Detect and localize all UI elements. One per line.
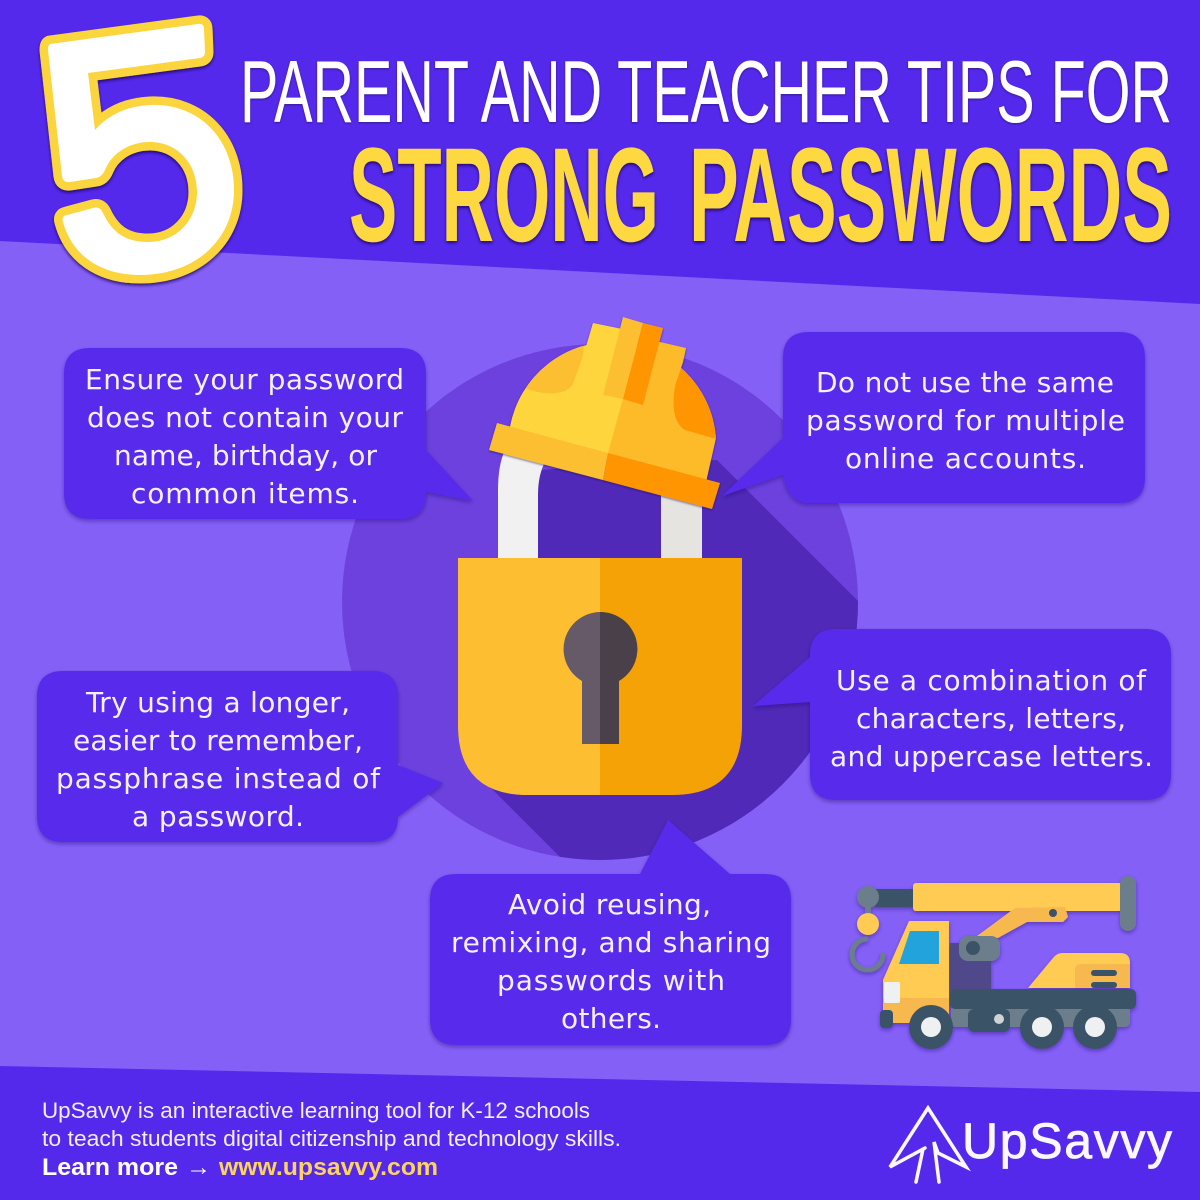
callout: combination of characters: and uppercase letters. [830, 740, 1153, 773]
callout: combination of characters: Use a combination of [836, 664, 1147, 697]
callout: personal information: common items. [131, 477, 359, 510]
long shadow of lock [491, 460, 858, 860]
callout: no repeated passwords [722, 332, 1145, 503]
icon: logo arrow [890, 1108, 966, 1182]
callout: passphrase: easier to remember, [73, 724, 363, 757]
footer call to action: www.upsavvy.com [218, 1154, 438, 1181]
callout: combination of characters: characters, letters, [856, 702, 1126, 735]
background: light diagonal panel [0, 241, 1200, 1092]
icon: background circle [342, 344, 858, 860]
big number 5 [48, 24, 234, 275]
footer description: to teach students digital citizenship and technology skills. [42, 1126, 621, 1151]
callout: personal information [64, 348, 473, 519]
footer call to action: → [186, 1154, 211, 1181]
callout: personal information: Ensure your password [85, 363, 404, 396]
callout: passphrase: passphrase instead of [56, 762, 381, 795]
title line 2 [349, 121, 1172, 270]
logo wordmark: UpSavvy [962, 1113, 1172, 1169]
hard hat [488, 317, 721, 511]
keyhole [564, 612, 637, 744]
callout: combination of characters [753, 629, 1171, 800]
callout: personal information: does not contain your [87, 401, 403, 434]
logo: UpSavvy [890, 1108, 1172, 1182]
callout: avoid sharing: Avoid reusing, [508, 888, 711, 921]
callout: no repeated passwords: Do not use the same [816, 366, 1114, 399]
icon: crane truck [852, 876, 1136, 1049]
footer call to action: Learn more [42, 1154, 178, 1181]
footer call to action [42, 1154, 438, 1181]
padlock body [458, 558, 742, 795]
callout: passphrase: Try using a longer, [85, 686, 350, 719]
callout: avoid sharing: remixing, and sharing [451, 926, 771, 959]
callout: no repeated passwords: online accounts. [845, 442, 1086, 475]
icon: padlock with hard hat [458, 300, 742, 795]
callout: avoid sharing: others. [561, 1002, 661, 1035]
callout: no repeated passwords: password for multiple [806, 404, 1125, 437]
title line 2: STRONG [349, 121, 659, 270]
callout: avoid sharing: passwords with [497, 964, 725, 997]
footer description: UpSavvy is an interactive learning tool for K-12 schools [42, 1098, 590, 1123]
padlock shackle [498, 450, 702, 558]
footer description [42, 1098, 621, 1151]
callout: avoid sharing [430, 820, 791, 1045]
callout: personal information: name, birthday, or [114, 439, 377, 472]
callout: passphrase: a password. [132, 800, 304, 833]
callout: passphrase [37, 671, 443, 842]
